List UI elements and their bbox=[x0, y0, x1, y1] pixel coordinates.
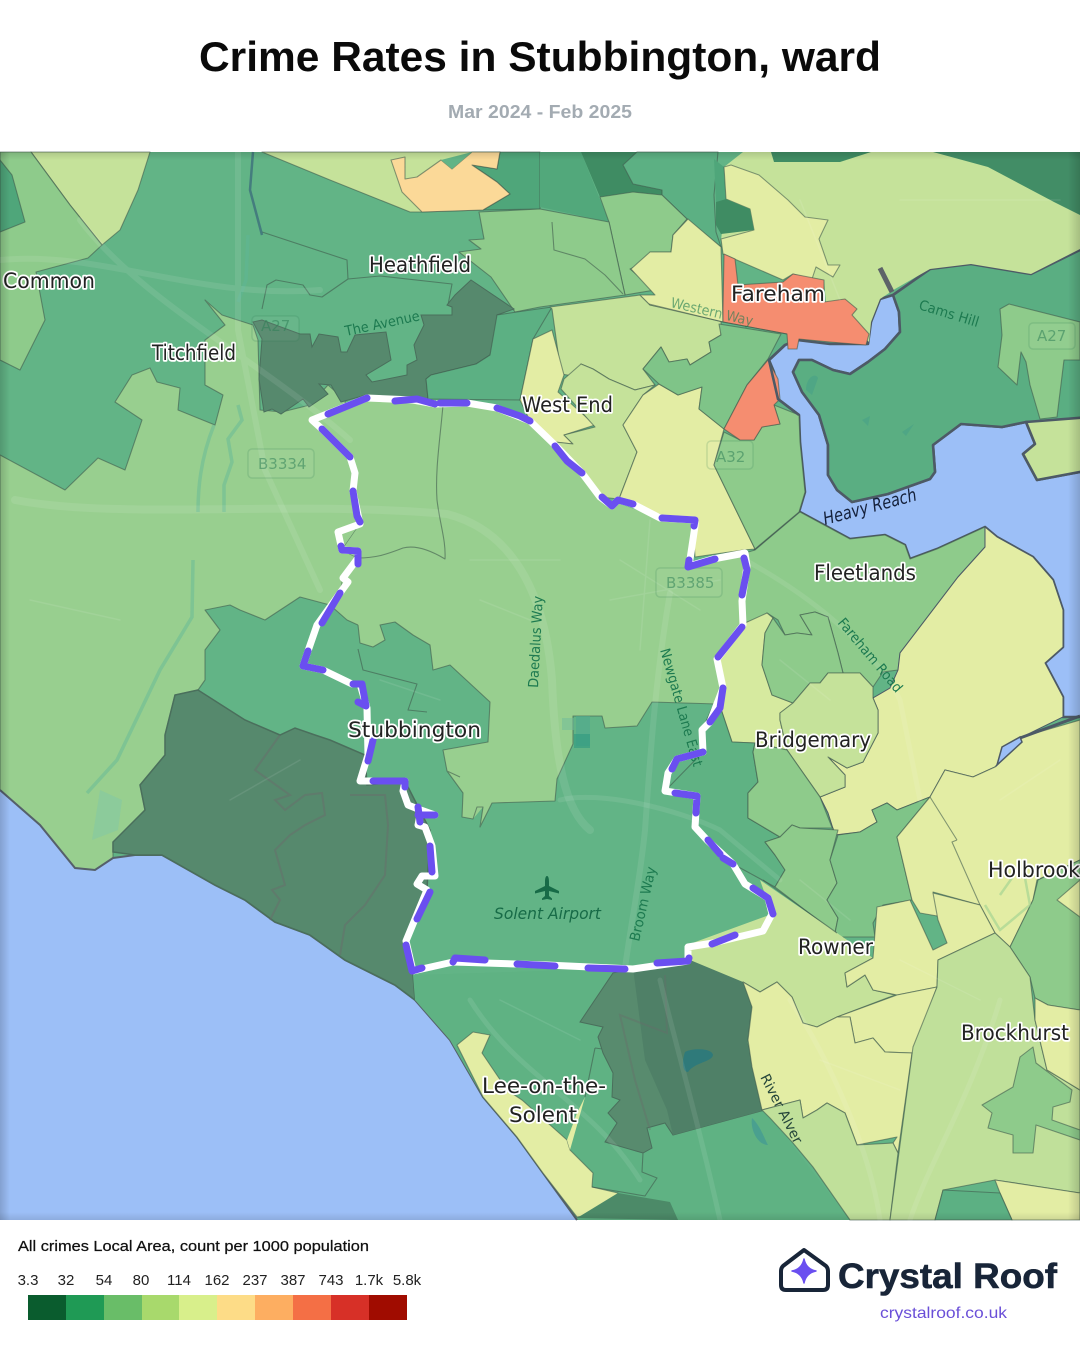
road shields: A32 bbox=[716, 448, 745, 466]
legend scale labels: 237 bbox=[242, 1272, 268, 1289]
place name labels: Common bbox=[3, 269, 95, 293]
legend colour bar bbox=[28, 1295, 407, 1320]
peninsula ward bbox=[793, 245, 1080, 502]
logo: Crystal Roof bbox=[781, 1250, 1057, 1322]
legend scale labels: 743 bbox=[318, 1272, 344, 1289]
panel: choropleth map bbox=[0, 152, 1080, 1220]
airfield detail bbox=[562, 716, 590, 748]
icon: house with star bbox=[781, 1250, 828, 1290]
Bridgemary wards bbox=[665, 612, 930, 937]
place name labels bbox=[3, 253, 1080, 1127]
place name labels: Titchfield bbox=[151, 341, 236, 365]
dark south ward bbox=[580, 960, 768, 1153]
road and place small labels: The Avenue bbox=[343, 308, 421, 340]
coast strip bbox=[457, 1032, 657, 1217]
south wards bbox=[413, 960, 850, 1220]
place name labels: Fareham bbox=[731, 282, 825, 306]
road and place small labels: River Alver bbox=[756, 1072, 805, 1147]
east pale ward bbox=[820, 527, 1063, 835]
place name labels: Lee-on-the- bbox=[482, 1074, 606, 1098]
left light green wards bbox=[0, 300, 360, 870]
legend scale labels: 5.8k bbox=[393, 1272, 422, 1289]
green ward south of north dark patch bbox=[426, 307, 552, 400]
Rowner wards bbox=[687, 880, 1080, 1220]
place name labels: Bridgemary bbox=[755, 728, 871, 752]
road shields bbox=[248, 316, 1075, 597]
bottom dark edge bbox=[577, 1193, 678, 1220]
legend scale labels: 1.7k bbox=[355, 1272, 384, 1289]
place name labels: Stubbington bbox=[348, 718, 481, 742]
legend scale labels: 80 bbox=[133, 1272, 149, 1289]
title: Crime Rates in Stubbington, ward bbox=[199, 33, 881, 80]
place name labels: Rowner bbox=[798, 935, 873, 959]
water: Portchester creek and Heavy Reach bbox=[755, 295, 1080, 717]
website: crystalroof.co.uk bbox=[880, 1305, 1008, 1322]
road and place small labels: Broom Way bbox=[627, 865, 660, 943]
place name labels: Heathfield bbox=[369, 253, 471, 277]
dark south-west ward bbox=[113, 690, 430, 1000]
dark ward interior lines bbox=[255, 735, 388, 955]
map edge vignette bbox=[0, 152, 1080, 1220]
legend scale labels: 3.3 bbox=[18, 1272, 38, 1289]
road and place small labels: Heavy Reach bbox=[821, 485, 919, 530]
legend title: All crimes Local Area, count per 1000 population bbox=[18, 1238, 369, 1255]
ward boundary: Stubbington bbox=[303, 398, 773, 971]
place name labels: West End bbox=[522, 393, 613, 417]
brand name: Crystal Roof bbox=[838, 1257, 1057, 1296]
place name labels: Fleetlands bbox=[814, 561, 916, 585]
place name labels: Holbrook bbox=[988, 858, 1080, 882]
road shields: A27 bbox=[1037, 327, 1066, 345]
legend scale labels: 387 bbox=[280, 1272, 306, 1289]
legend scale labels: 162 bbox=[204, 1272, 230, 1289]
Cams Hill east wards bbox=[806, 304, 1080, 480]
ward internal borders bbox=[330, 405, 717, 827]
road and place small labels: Western Way bbox=[669, 295, 755, 330]
road shields: A27 bbox=[261, 317, 290, 335]
central wards north of ward bbox=[520, 219, 805, 557]
legend bbox=[18, 1238, 422, 1320]
road and place small labels: Fareham Road bbox=[834, 615, 905, 696]
left rivers and reserves bbox=[87, 152, 262, 840]
sea bbox=[0, 790, 577, 1220]
place name labels: Solent bbox=[509, 1103, 577, 1127]
faint road network bbox=[0, 152, 1060, 1220]
road and place small labels: Daedalus Way bbox=[526, 595, 547, 688]
north-west wards bbox=[0, 152, 721, 370]
coastline bbox=[0, 790, 577, 1220]
red wards: Fareham bbox=[649, 254, 869, 440]
road shields: B3334 bbox=[258, 455, 306, 473]
dark north ward bbox=[253, 280, 514, 414]
road and place small labels: Cams Hill bbox=[917, 298, 981, 331]
road and place small labels: Solent Airport bbox=[494, 904, 602, 923]
road shields: B3385 bbox=[666, 574, 714, 592]
legend scale labels bbox=[18, 1272, 422, 1289]
subtitle: date range: Mar 2024 - Feb 2025 bbox=[448, 102, 632, 122]
Fleetlands ward bbox=[742, 512, 985, 687]
legend scale labels: 32 bbox=[58, 1272, 74, 1289]
north-east wards bbox=[714, 152, 1080, 342]
road and place small labels: Newgate Lane East bbox=[656, 647, 705, 769]
road and place small labels bbox=[343, 295, 981, 1147]
Stubbington ward light green fill bbox=[312, 398, 745, 827]
legend scale labels: 114 bbox=[167, 1272, 191, 1289]
place name labels: Brockhurst bbox=[961, 1021, 1069, 1045]
legend scale labels: 54 bbox=[96, 1272, 112, 1289]
icon: airport plane bbox=[535, 876, 559, 900]
Holbrook pale wards bbox=[897, 716, 1080, 1010]
